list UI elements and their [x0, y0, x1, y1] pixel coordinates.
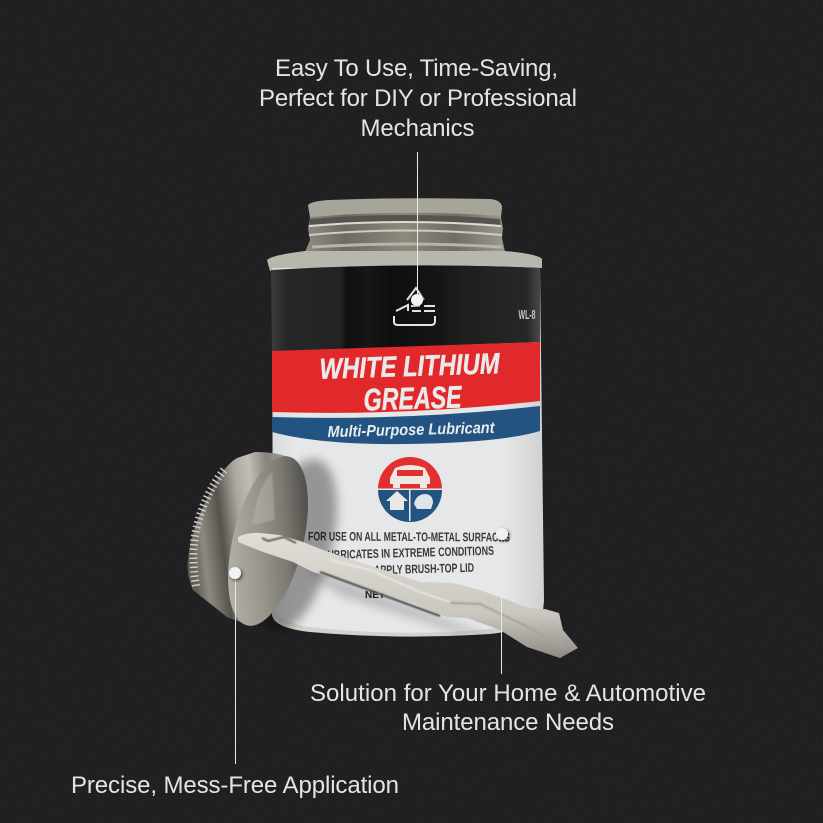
black label band	[271, 265, 540, 352]
marker dot	[229, 567, 241, 579]
callout text: Precise, Mess-Free Application	[71, 772, 399, 799]
callout text: Solution for Your Home & Automotive	[310, 680, 706, 707]
lid inside	[213, 448, 323, 634]
can shoulder	[267, 251, 542, 271]
marker dot	[496, 528, 508, 540]
lid knurled edge	[194, 470, 224, 586]
lid shadow on can	[240, 451, 352, 639]
blue label band	[272, 406, 540, 444]
subtitle: Multi-Purpose Lubricant	[327, 420, 495, 441]
usage text: LUBRICATES IN EXTREME CONDITIONS	[322, 544, 494, 562]
product name: WHITE LITHIUM	[319, 348, 501, 386]
callout: top: Mechanics	[360, 115, 474, 142]
usage text: APPLY BRUSH-TOP LID	[374, 561, 474, 577]
usage text	[308, 529, 510, 601]
callout text: Easy To Use, Time-Saving,	[275, 55, 558, 82]
leader line	[417, 152, 418, 300]
usage text: NET	[365, 590, 385, 601]
product name	[319, 348, 502, 419]
stick texture	[262, 537, 565, 648]
can body	[272, 268, 544, 635]
leader line	[501, 534, 502, 674]
product: grease can	[267, 198, 544, 637]
product name: GREASE	[363, 379, 463, 417]
leader line	[235, 574, 236, 764]
red label band	[272, 342, 540, 413]
can neck and threaded rim	[305, 198, 505, 252]
lid inner highlight	[252, 472, 275, 525]
product code: WL-8	[518, 307, 536, 322]
usage text: FOR USE ON ALL METAL-TO-METAL SURFACES	[308, 529, 510, 545]
base rim	[272, 600, 544, 637]
stick shadow on can	[300, 565, 500, 640]
marker dot	[411, 294, 423, 306]
lid	[188, 448, 323, 634]
callout: right: Maintenance Needs	[402, 709, 614, 736]
lid outer skirt	[188, 452, 292, 625]
callout: right	[310, 528, 706, 736]
callout: left	[71, 567, 399, 799]
callout: top: Perfect for DIY or Professional	[259, 85, 577, 112]
grease brush stick	[238, 533, 578, 658]
callout: top	[259, 55, 577, 306]
brand logo	[394, 288, 435, 325]
usage icon badge	[378, 457, 442, 522]
